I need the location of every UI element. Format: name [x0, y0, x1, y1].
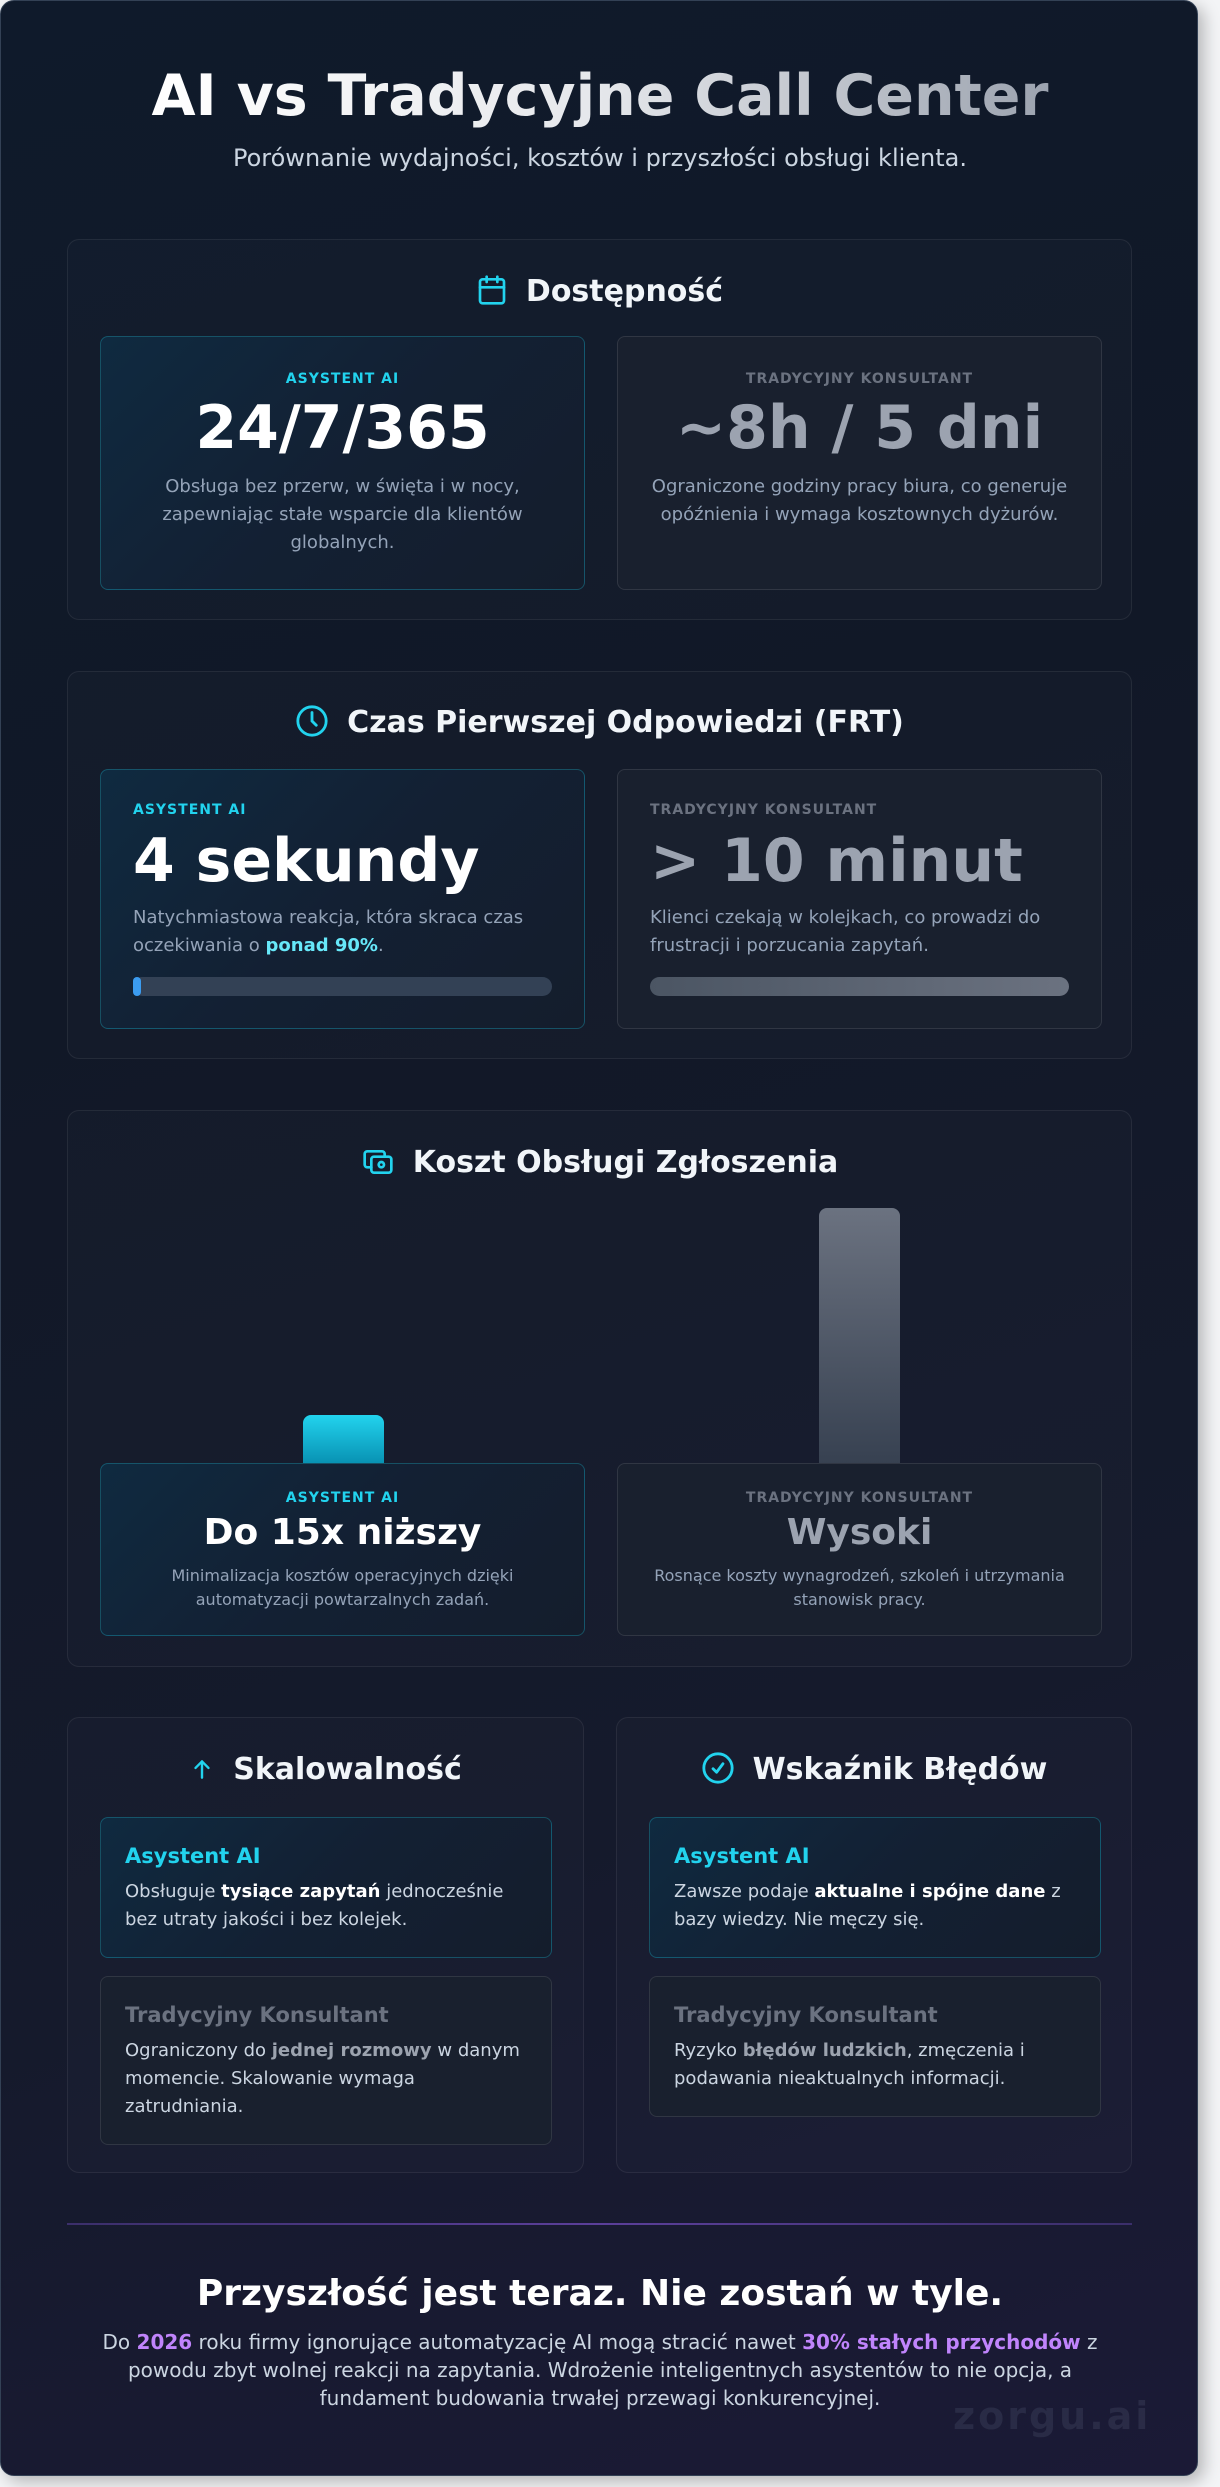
heading: Dostępność: Dostępność — [526, 274, 723, 309]
card: AI scalability — [100, 1817, 552, 1958]
card: traditional availability: opóźnienia i wymaga kosztownych dyżurów. — [661, 504, 1058, 525]
card: traditional availability: Ograniczone godziny pracy biura, co generuje — [652, 476, 1067, 497]
card: traditional errors — [649, 1976, 1101, 2117]
card: AI errors: Asystent AI — [674, 1844, 810, 1868]
card: AI FRT: 4 sekundy — [133, 826, 479, 896]
card: traditional FRT: > 10 minut — [650, 826, 1023, 896]
footer paragraph: powodu zbyt wolnej reakcji na zapytania. Wdrożenie inteligentnych asystentów to nie opcja, a — [128, 2358, 1072, 2382]
card: traditional FRT: TRADYCYJNY KONSULTANT — [650, 802, 877, 818]
card: AI availability: globalnych. — [290, 532, 394, 553]
card: traditional cost: Wysoki — [787, 1512, 932, 1553]
heading: Wskaźnik Błędów: Wskaźnik Błędów — [753, 1752, 1047, 1787]
heading: cost: Koszt Obsługi Zgłoszenia — [413, 1145, 838, 1180]
footer heading: Przyszłość jest teraz. Nie zostań w tyle. — [197, 2273, 1003, 2314]
watermark: zorgu.ai — [953, 2394, 1151, 2438]
card: AI availability: zapewniając stałe wsparcie dla klientów — [162, 504, 523, 525]
card: traditional FRT — [617, 769, 1102, 1029]
card: traditional availability: TRADYCYJNY KONSULTANT — [746, 371, 973, 387]
title: AI vs Tradycyjne Call Center — [151, 63, 1049, 129]
card: traditional errors: Tradycyjny Konsultant — [674, 2003, 938, 2027]
progress bar traditional — [650, 977, 1069, 996]
bar: traditional cost — [819, 1208, 900, 1464]
card: AI errors: Zawsze podaje aktualne i spójne dane z — [674, 1881, 1061, 1902]
card: traditional FRT: frustracji i porzucania zapytań. — [650, 935, 929, 956]
card: traditional cost: stanowisk pracy. — [793, 1590, 926, 1609]
card: traditional scalability: zatrudniania. — [125, 2096, 243, 2117]
card: AI availability: 24/7/365 — [195, 393, 490, 463]
card: traditional errors: podawania nieaktualnych informacji. — [674, 2068, 1005, 2089]
card: traditional cost: TRADYCYJNY KONSULTANT — [746, 1490, 973, 1506]
card: AI FRT: oczekiwania o ponad 90%. — [133, 935, 384, 956]
card: AI cost — [100, 1463, 585, 1636]
card: traditional cost — [617, 1463, 1102, 1636]
panel: FRT — [67, 671, 1132, 1059]
card: traditional scalability — [100, 1976, 552, 2145]
footer paragraph: Do 2026 roku firmy ignorujące automatyzację AI mogą stracić nawet 30% stałych przychodów z — [103, 2330, 1097, 2354]
panel: scalability — [67, 1717, 584, 2173]
card: AI FRT — [100, 769, 585, 1029]
card: AI cost: ASYSTENT AI — [286, 1490, 399, 1506]
card: traditional scalability: Ograniczony do jednej rozmowy w danym — [125, 2040, 520, 2061]
card: AI availability: Obsługa bez przerw, w święta i w nocy, — [165, 476, 520, 497]
panel: error rate — [616, 1717, 1132, 2173]
card: AI cost: Minimalizacja kosztów operacyjnych dzięki — [172, 1566, 513, 1585]
progress bar AI — [133, 977, 552, 996]
card: AI availability: ASYSTENT AI — [286, 371, 399, 387]
heading: FRT: Czas Pierwszej Odpowiedzi (FRT) — [347, 705, 904, 740]
card: AI errors — [649, 1817, 1101, 1958]
subtitle: Porównanie wydajności, kosztów i przyszłości obsługi klienta. — [233, 144, 967, 172]
card: AI scalability: Asystent AI — [125, 1844, 261, 1868]
card: traditional scalability: momencie. Skalowanie wymaga — [125, 2068, 415, 2089]
card: AI availability — [100, 336, 585, 590]
card: traditional cost: Rosnące koszty wynagrodzeń, szkoleń i utrzymania — [654, 1566, 1065, 1585]
card: AI FRT: Natychmiastowa reakcja, która skraca czas — [133, 907, 523, 928]
card: AI FRT: ASYSTENT AI — [133, 802, 246, 818]
footer paragraph: fundament budowania trwałej przewagi konkurencyjnej. — [320, 2386, 880, 2410]
card: traditional availability — [617, 336, 1102, 590]
card: AI scalability: bez utraty jakości i bez kolejek. — [125, 1909, 407, 1930]
bar: AI cost — [303, 1415, 384, 1464]
card: AI cost: Do 15x niższy — [204, 1512, 481, 1553]
card: traditional availability: ~8h / 5 dni — [676, 393, 1043, 463]
card: AI errors: bazy wiedzy. Nie męczy się. — [674, 1909, 924, 1930]
card: AI cost: automatyzacji powtarzalnych zadań. — [196, 1590, 489, 1609]
heading: Skalowalność: Skalowalność — [233, 1752, 462, 1787]
panel: availability — [67, 239, 1132, 620]
card: traditional errors: Ryzyko błędów ludzkich, zmęczenia i — [674, 2040, 1025, 2061]
panel: cost — [67, 1110, 1132, 1667]
card: traditional scalability: Tradycyjny Konsultant — [125, 2003, 389, 2027]
card: traditional FRT: Klienci czekają w kolejkach, co prowadzi do — [650, 907, 1040, 928]
card: AI scalability: Obsługuje tysiące zapytań jednocześnie — [125, 1881, 503, 1902]
footer paragraph — [103, 2330, 1097, 2410]
